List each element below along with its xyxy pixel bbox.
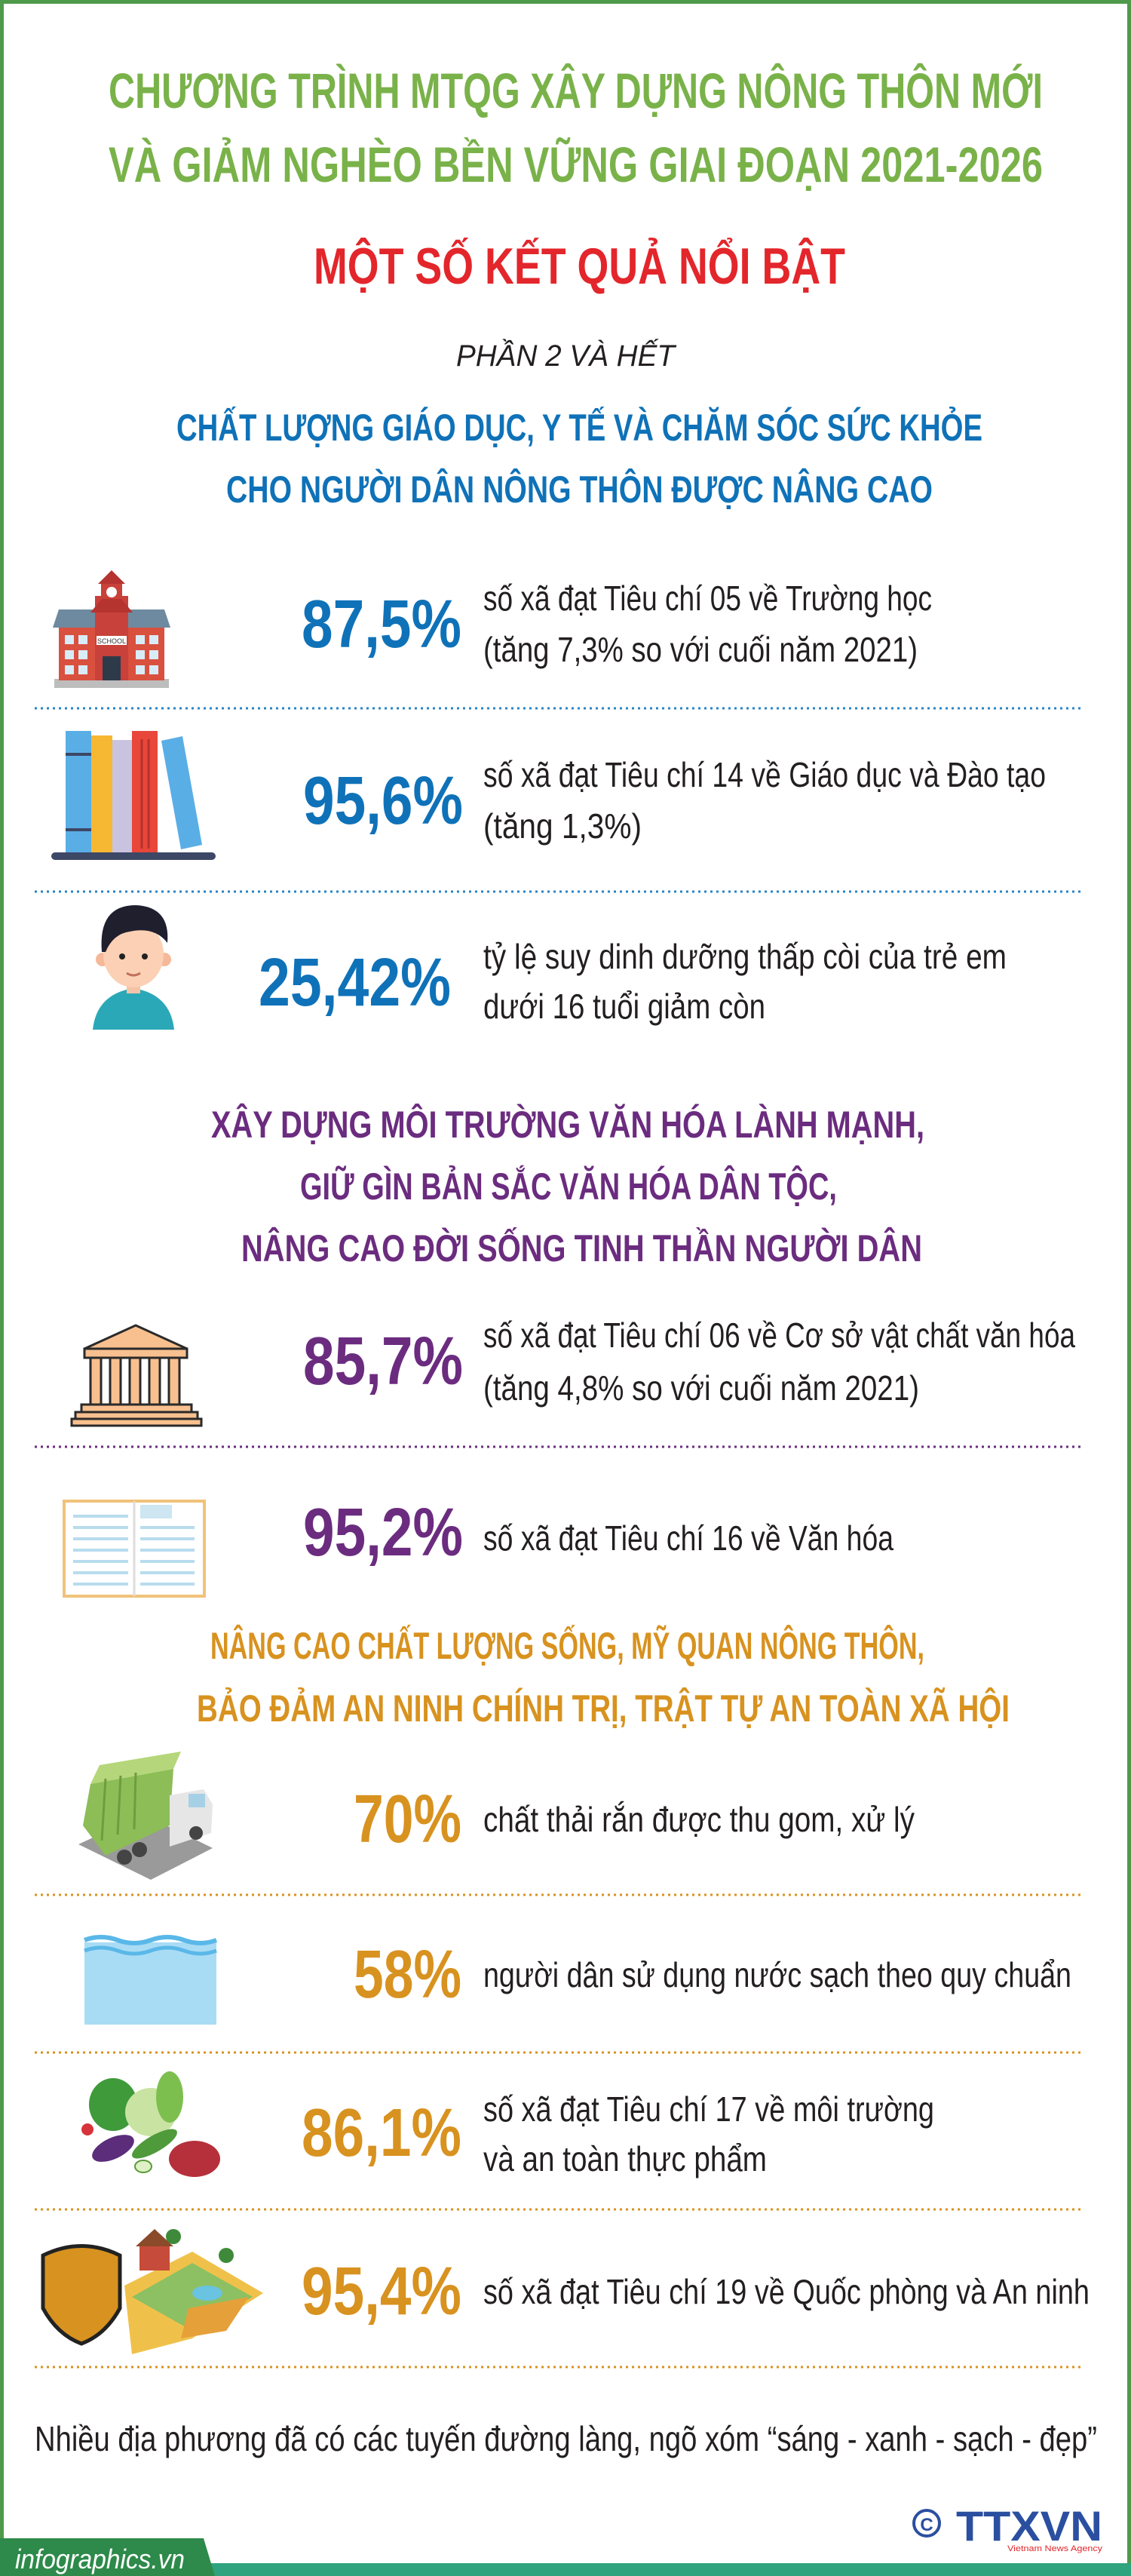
heading: living quality bbox=[197, 1624, 1010, 1730]
value 95,2%: 95,2% bbox=[303, 1495, 463, 1570]
icon: open book bbox=[64, 1501, 204, 1596]
subtitle red: MỘT SỐ KẾT QUẢ NỔI BẬT bbox=[314, 237, 845, 295]
value 86,1%: 86,1% bbox=[302, 2095, 461, 2171]
heading: culture: GIỮ GÌN BẢN SẮC VĂN HÓA DÂN TỘC, bbox=[300, 1165, 837, 1208]
icon: school: SCHOOL bbox=[97, 637, 126, 645]
heading: education and health: CHO NGƯỜI DÂN NÔNG THÔN ĐƯỢC NÂNG CAO bbox=[226, 468, 933, 511]
logo: TTXVN: C bbox=[920, 2515, 933, 2535]
value 70%: 70% bbox=[354, 1782, 461, 1857]
icon: classical building bbox=[72, 1325, 201, 1426]
heading: culture bbox=[211, 1103, 924, 1270]
description: (tăng 4,8% so với cuối năm 2021) bbox=[483, 1368, 919, 1408]
row: culture house 85,7% bbox=[72, 1316, 1075, 1426]
logo: TTXVN bbox=[914, 2502, 1103, 2553]
bottom bar bbox=[0, 2538, 1131, 2576]
value 95,6%: 95,6% bbox=[303, 763, 463, 839]
value 25,42%: 25,42% bbox=[259, 945, 451, 1021]
row: open book 95,2% bbox=[64, 1495, 893, 1596]
row: books 95,6% bbox=[51, 731, 1046, 860]
description: và an toàn thực phẩm bbox=[483, 2139, 767, 2178]
heading: culture: XÂY DỰNG MÔI TRƯỜNG VĂN HÓA LÀNH MẠNH, bbox=[211, 1103, 924, 1146]
title bbox=[109, 63, 1043, 192]
bottom bar: infographics.vn bbox=[15, 2544, 185, 2574]
icon: child bbox=[93, 905, 174, 1030]
part label: PHẦN 2 VÀ HẾT bbox=[456, 338, 676, 373]
description: số xã đạt Tiêu chí 05 về Trường học bbox=[483, 579, 932, 618]
icon: garbage truck bbox=[78, 1752, 213, 1880]
description bbox=[483, 755, 1046, 846]
description: dưới 16 tuổi giảm còn bbox=[483, 987, 765, 1026]
row: security 95,4% bbox=[43, 2229, 1090, 2354]
value 87,5%: 87,5% bbox=[302, 587, 461, 662]
logo: TTXVN: TTXVN bbox=[956, 2502, 1102, 2550]
heading: education and health bbox=[176, 406, 982, 511]
icon: school bbox=[53, 570, 170, 688]
heading: culture: NÂNG CAO ĐỜI SỐNG TINH THẦN NGƯỜI DÂN bbox=[241, 1227, 922, 1270]
description: tỷ lệ suy dinh dưỡng thấp còi của trẻ em bbox=[483, 937, 1007, 976]
row: school 87,5% bbox=[53, 570, 932, 688]
value 95,4%: 95,4% bbox=[302, 2254, 461, 2329]
description: (tăng 1,3%) bbox=[483, 806, 642, 846]
description: số xã đạt Tiêu chí 17 về môi trường bbox=[483, 2089, 934, 2129]
value 85,7%: 85,7% bbox=[303, 1324, 463, 1399]
row: water 58% bbox=[84, 1937, 1071, 2025]
icon: water bbox=[84, 1937, 216, 2025]
description: số xã đạt Tiêu chí 16 về Văn hóa bbox=[483, 1518, 893, 1558]
logo: TTXVN: Vietnam News Agency bbox=[1007, 2544, 1103, 2553]
description bbox=[483, 1316, 1075, 1408]
icon: vegetables bbox=[81, 2071, 220, 2177]
description bbox=[483, 2089, 934, 2178]
description bbox=[483, 937, 1007, 1026]
description: (tăng 7,3% so với cuối năm 2021) bbox=[483, 630, 918, 669]
value 58%: 58% bbox=[354, 1937, 461, 2013]
icon: books bbox=[51, 731, 216, 860]
description bbox=[483, 579, 932, 669]
row: food 86,1% bbox=[81, 2071, 934, 2178]
description: chất thải rắn được thu gom, xử lý bbox=[483, 1800, 915, 1839]
row: garbage truck 70% bbox=[78, 1752, 915, 1880]
icon: shield and farm bbox=[43, 2229, 263, 2354]
row: child 25,42% bbox=[93, 905, 1007, 1030]
